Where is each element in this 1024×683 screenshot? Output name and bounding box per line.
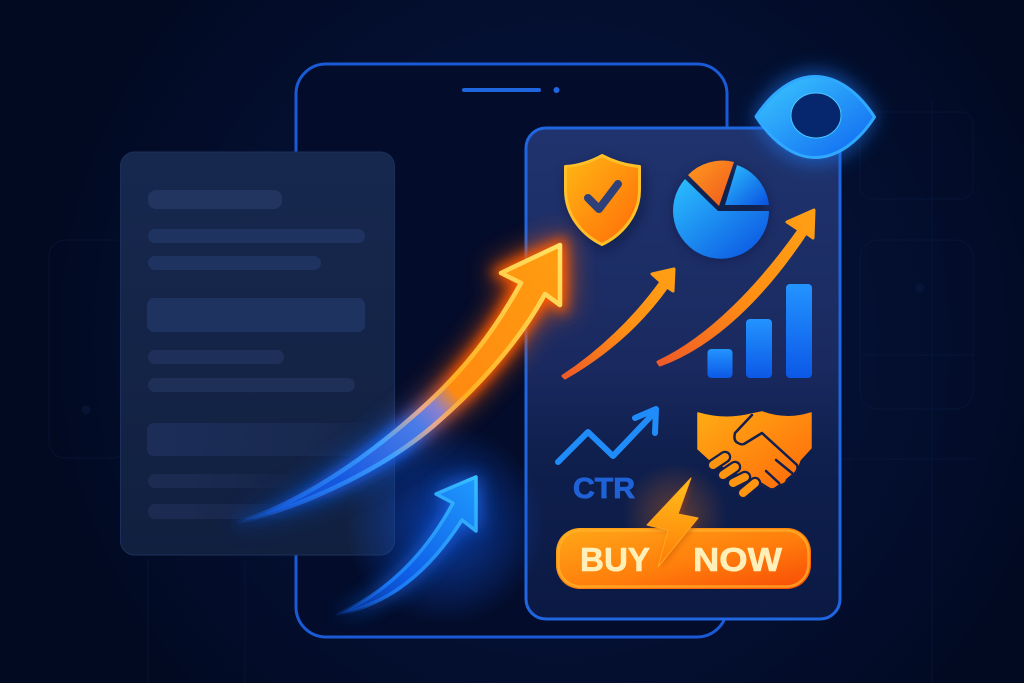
icon: long rising arrow (658, 210, 814, 365)
icon: shield with check (566, 156, 644, 250)
bar chart (708, 284, 812, 378)
icon: lightning bolt (647, 478, 700, 569)
glow: blue halo behind arrow (345, 425, 545, 625)
icon: pie chart (673, 161, 769, 259)
button: buy now: NOW (693, 541, 783, 578)
panel: conversion card (526, 128, 840, 619)
back device outline (296, 64, 727, 637)
panel: faded document (120, 152, 394, 555)
arrow: main orange growth arrow (235, 243, 562, 523)
device speaker and camera (462, 87, 560, 93)
document text placeholders (147, 190, 385, 519)
icon: eye (754, 72, 876, 162)
icon: small rising arrow (563, 269, 674, 378)
CTR label: CTR (573, 473, 635, 505)
glow: bolt halo (623, 463, 727, 567)
button: buy now: BUY (580, 541, 650, 578)
icon: handshake (698, 412, 811, 493)
arrow: blue growth arrow (335, 475, 478, 615)
button: buy now (556, 528, 811, 589)
handshake knuckles (713, 457, 755, 493)
icon: CTR trend line (558, 409, 656, 462)
